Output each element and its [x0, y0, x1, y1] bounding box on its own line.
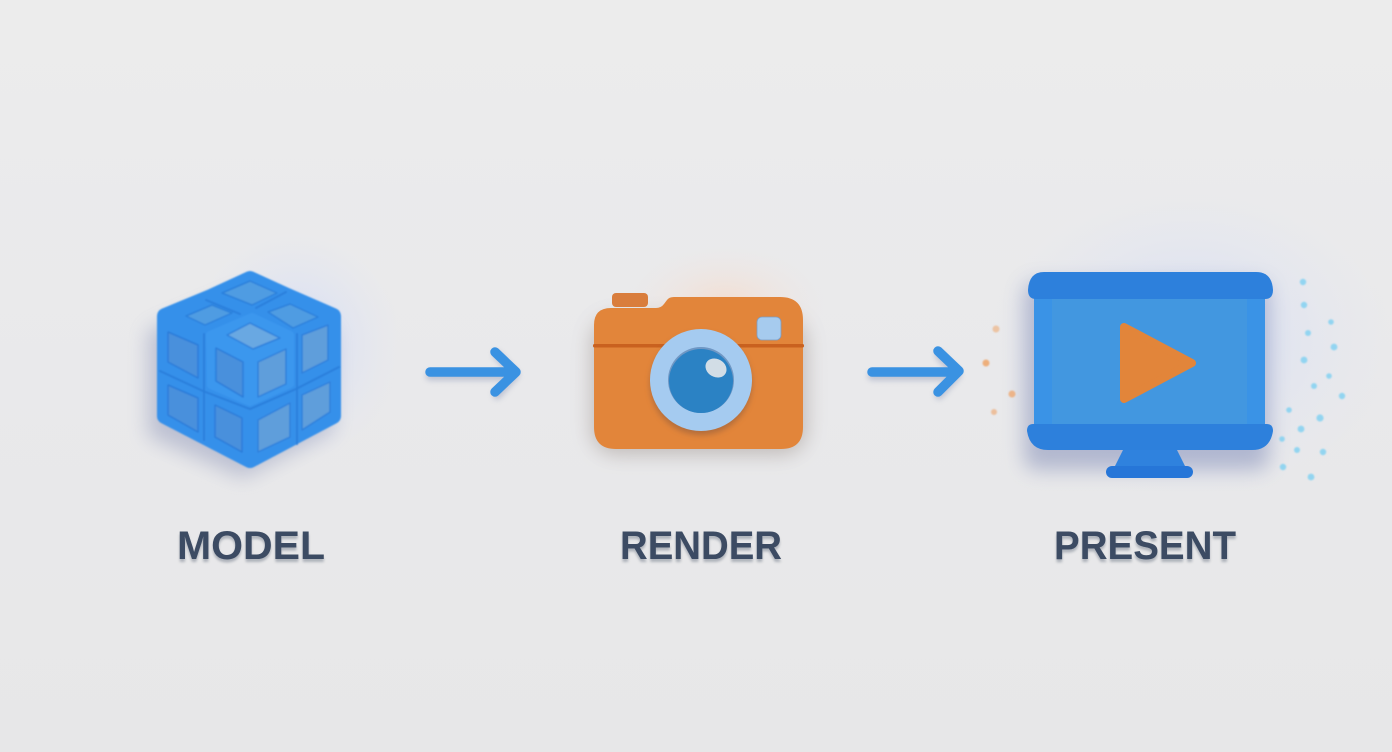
- camera body: [594, 297, 803, 449]
- side windows: right and front top: [227, 323, 330, 452]
- cube silhouette: [165, 279, 333, 460]
- viewfinder: [757, 317, 781, 340]
- arrow: render to present: [872, 351, 959, 395]
- upper front cube frame: [210, 317, 290, 402]
- arrow: model to render: [430, 352, 516, 395]
- screen panel: [1052, 298, 1247, 424]
- screen frame: [1034, 296, 1265, 426]
- side windows: left: [168, 332, 243, 452]
- icon: present monitor: [1024, 272, 1273, 478]
- play button: [1124, 327, 1192, 399]
- camera band: [593, 344, 804, 348]
- icon: model cube: [148, 279, 339, 478]
- cyan particles: [1279, 279, 1345, 480]
- shutter button: [612, 293, 648, 307]
- label: PRESENT: PRESENT: [1054, 524, 1236, 568]
- icon: render camera: [592, 293, 806, 454]
- top face windows: [186, 281, 318, 328]
- top bar: [1028, 272, 1273, 299]
- lens: [650, 329, 752, 435]
- bottom bar: [1027, 424, 1273, 450]
- orange particles: [982, 326, 1016, 415]
- label: RENDER: RENDER: [620, 524, 782, 568]
- monitor stand: [1114, 450, 1186, 468]
- seams: [160, 292, 339, 444]
- label: RENDER: RENDER: [620, 527, 782, 571]
- label: MODEL: MODEL: [177, 527, 325, 571]
- label: MODEL: MODEL: [177, 524, 325, 568]
- label: PRESENT: PRESENT: [1054, 527, 1236, 571]
